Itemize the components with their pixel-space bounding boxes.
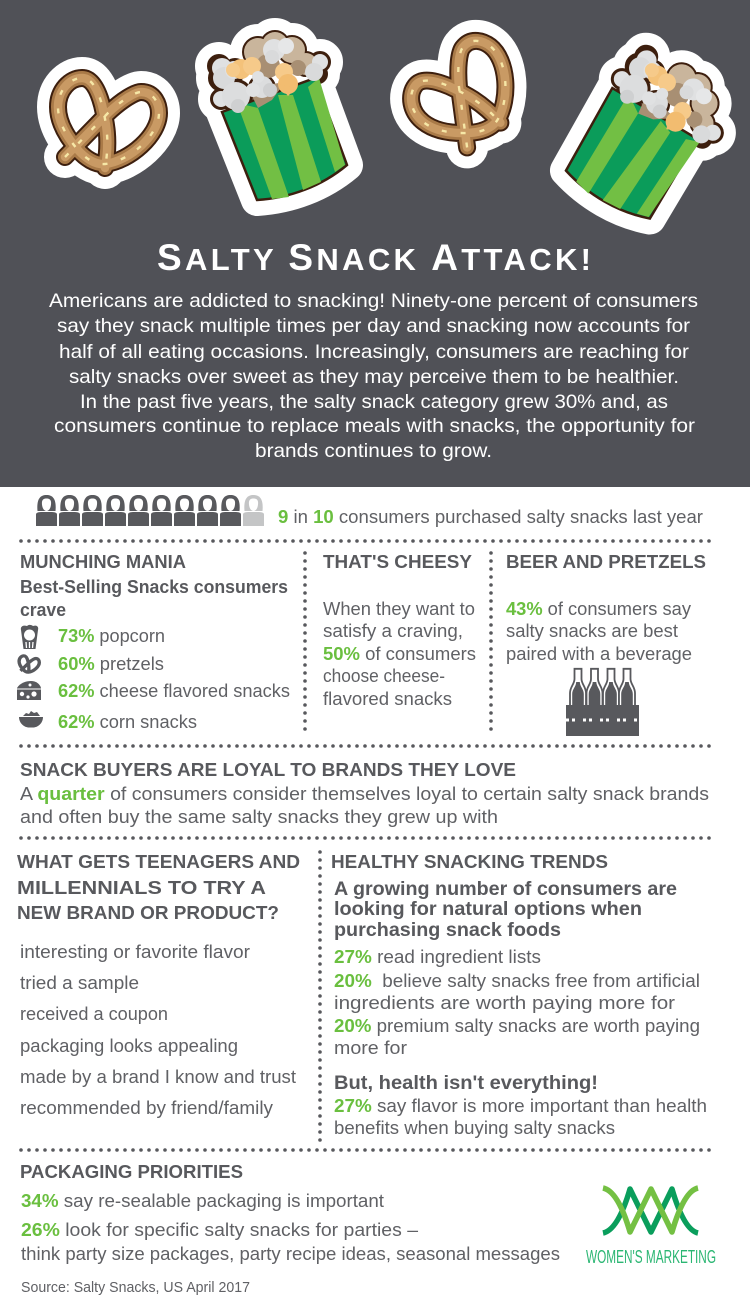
subheading: natural options: looking for natural options when [334, 899, 642, 920]
body: loyalty text: A quarter of consumers consider themselves loyal to certain salty snack brands [20, 783, 709, 804]
heading: healthy snacking: HEALTHY SNACKING TRENDS [331, 851, 608, 872]
intro paragraph [49, 290, 698, 462]
subheading: health isn't everything: But, health isn't everything! [334, 1073, 598, 1094]
icon: popcorn [21, 625, 38, 649]
header background panel [0, 0, 750, 487]
panel: teenagers and millennials [17, 851, 300, 1118]
stat: pretzels: 60% pretzels [58, 653, 164, 674]
subheading: best-selling snacks: crave [20, 600, 66, 620]
stats: natural options: ingredients are worth paying more for [334, 992, 675, 1013]
logo: women's marketing [586, 1188, 716, 1267]
icon: popcorn right [536, 28, 750, 241]
panel: beer and pretzels [506, 551, 706, 736]
list: reasons: packaging looks appealing [20, 1035, 238, 1056]
list: reasons: interesting or favorite flavor [20, 941, 250, 962]
stat: flavor: benefits when buying salty snacks [334, 1117, 615, 1138]
intro paragraph: Americans are addicted to snacking! Ninety-one percent of consumers [49, 290, 698, 312]
body: beer stat: salty snacks are best [506, 620, 678, 641]
heading: what gets teenagers: WHAT GETS TEENAGERS AND [17, 851, 300, 872]
subheading: natural options: purchasing snack foods [334, 920, 561, 941]
stat: parties: 26% look for specific salty snacks for parties – [21, 1219, 419, 1240]
heading: munching mania: MUNCHING MANIA [20, 551, 186, 572]
body: beer stat [506, 598, 692, 664]
icon: bowl [19, 711, 43, 728]
stat: flavor: 27% say flavor is more important than health [334, 1095, 707, 1116]
list: reasons: tried a sample [20, 972, 139, 993]
subheading: best-selling snacks: Best-Selling Snacks consumers [20, 577, 288, 597]
stats: natural options [334, 946, 700, 1058]
icon: popcorn left [209, 32, 347, 200]
source: Source: Salty Snacks, US April 2017 [21, 1280, 250, 1296]
body: cheesy stat: flavored snacks [323, 688, 452, 709]
list: reasons: made by a brand I know and trust [20, 1066, 296, 1087]
list: reasons [20, 941, 296, 1118]
panel: packaging priorities [20, 1161, 560, 1264]
panel: that's cheesy [323, 551, 476, 709]
icon: pretzel [19, 656, 39, 673]
icon: beer crate [566, 669, 639, 736]
body: cheesy stat: choose cheese- [323, 665, 445, 686]
stats: natural options: 20% premium salty snacks are worth paying [334, 1015, 700, 1036]
title: SALTY SNACK ATTACK! [157, 237, 591, 278]
subheading: natural options: A growing number of consumers are [334, 879, 677, 900]
panel: brand loyalty [20, 759, 709, 827]
icon row: 9 in 10 women [36, 495, 264, 526]
intro paragraph: salty snacks over sweet as they may perceive them to be healthier. [69, 366, 679, 388]
stat: popcorn: 73% popcorn [58, 625, 165, 646]
body: loyalty text: and often buy the same salty snacks they grew up with [20, 806, 498, 827]
heading: what gets teenagers [17, 851, 300, 923]
heading: that's cheesy: THAT'S CHEESY [323, 551, 473, 572]
panel: healthy snacking trends [331, 851, 707, 1138]
intro paragraph: brands continues to grow. [255, 440, 492, 462]
stat: 9 in 10 consumers: 9 in 10 consumers purchased salty snacks last year [278, 506, 703, 527]
list: reasons: received a coupon [20, 1003, 168, 1024]
stat: parties: think party size packages, party recipe ideas, seasonal messages [21, 1243, 560, 1264]
stat: cheese: 62% cheese flavored snacks [58, 680, 290, 701]
subheading: natural options [334, 879, 677, 941]
body: loyalty text [20, 783, 709, 827]
stat: parties [21, 1219, 560, 1264]
heading: beer and pretzels: BEER AND PRETZELS [506, 551, 706, 572]
heading: what gets teenagers: NEW BRAND OR PRODUCT? [17, 902, 279, 923]
heading: snack buyers: SNACK BUYERS ARE LOYAL TO BRANDS THEY LOVE [20, 759, 516, 780]
intro paragraph: half of all eating occasions. Increasingly, consumers are reaching for [59, 341, 690, 363]
icon: pretzel left [58, 78, 159, 168]
icon: pretzel right [401, 25, 534, 160]
stat: re-sealable: 34% say re-sealable packaging is important [21, 1190, 384, 1211]
stats: natural options: 20% believe salty snacks free from artificial [334, 970, 700, 991]
icon: cheese [17, 681, 41, 700]
body: beer stat: paired with a beverage [506, 643, 692, 664]
stat: flavor [334, 1095, 707, 1138]
intro paragraph: say they snack multiple times per day and snacking now accounts for [57, 315, 691, 337]
body: beer stat: 43% of consumers say [506, 598, 692, 619]
body: cheesy stat: 50% of consumers [323, 643, 476, 664]
body: cheesy stat [323, 598, 476, 709]
heading: packaging priorities: PACKAGING PRIORITIES [20, 1161, 243, 1182]
stat: corn snacks: 62% corn snacks [58, 711, 197, 732]
intro paragraph: In the past five years, the salty snack category grew 30% and, as [80, 391, 668, 413]
stats: natural options: 27% read ingredient lists [334, 946, 541, 967]
stats: natural options: more for [334, 1037, 407, 1058]
heading: what gets teenagers: MILLENNIALS TO TRY A [17, 877, 266, 898]
list: reasons: recommended by friend/family [20, 1097, 274, 1118]
subheading: best-selling snacks [20, 577, 288, 620]
body: cheesy stat: satisfy a craving, [323, 620, 463, 641]
intro paragraph: consumers continue to replace meals with snacks, the opportunity for [54, 415, 696, 437]
body: cheesy stat: When they want to [323, 598, 475, 619]
panel: munching mania [17, 551, 290, 732]
